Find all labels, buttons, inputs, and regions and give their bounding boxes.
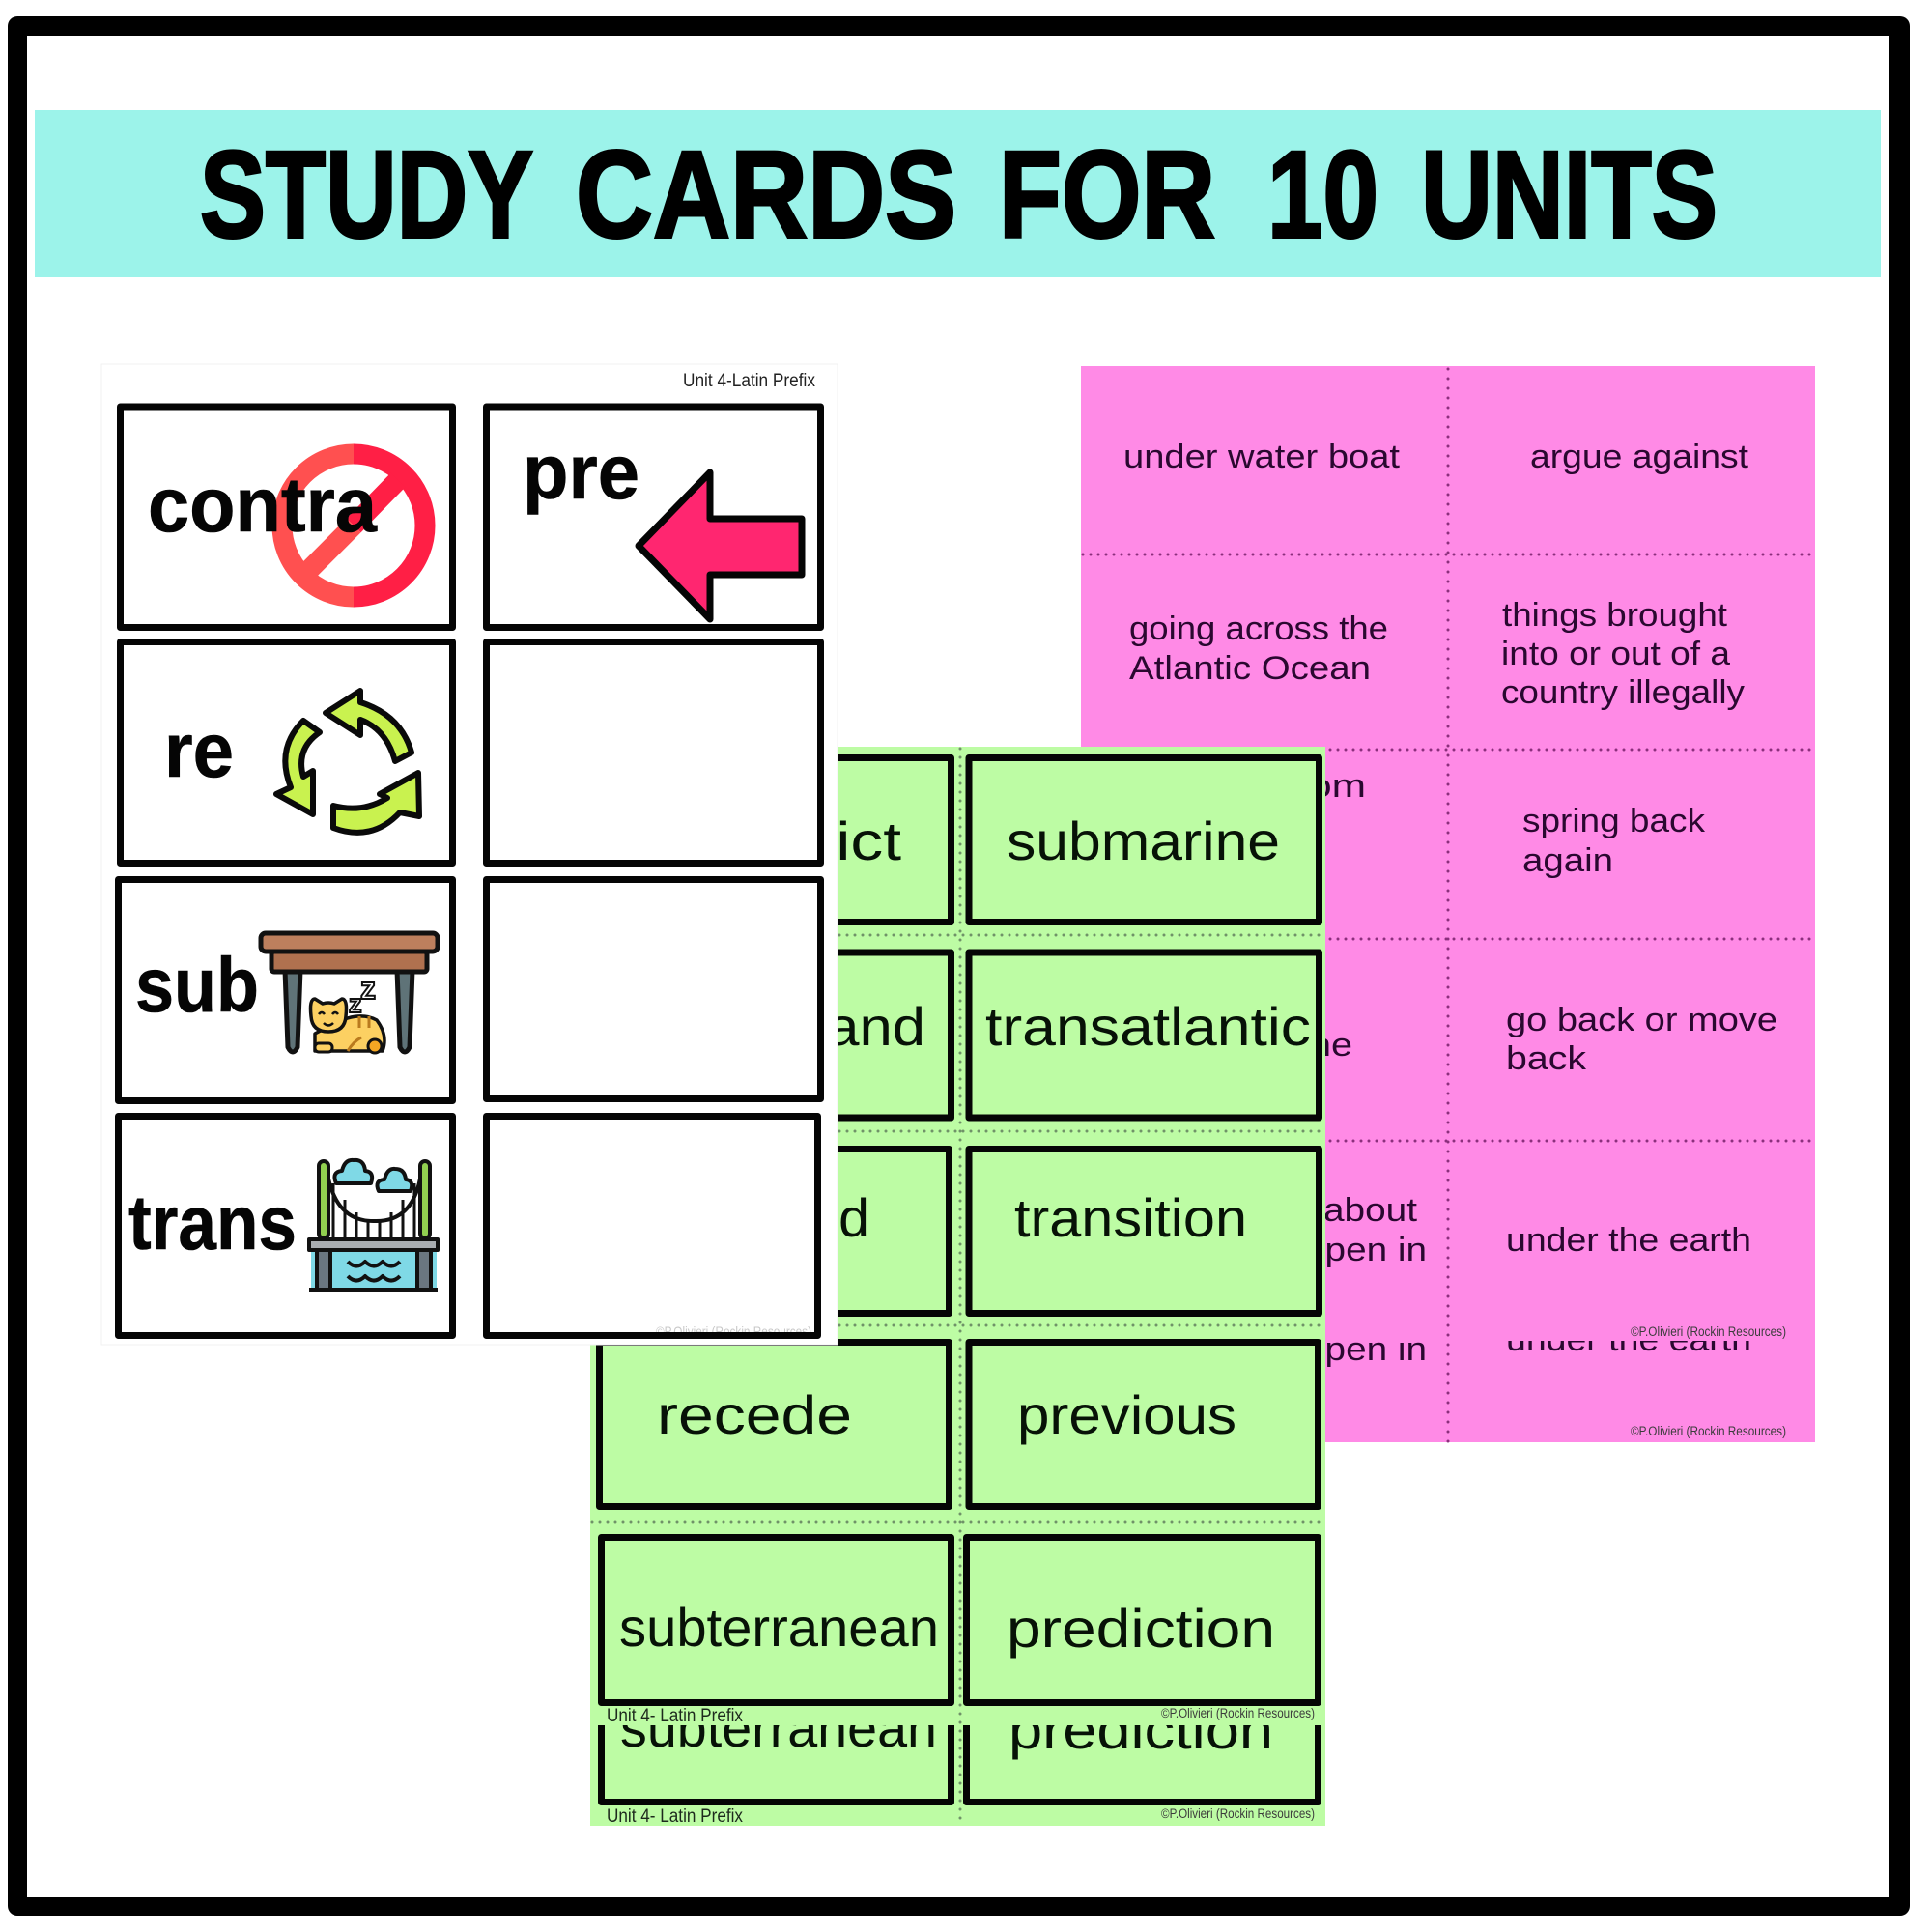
definition: spring back again: again [1522,842,1613,879]
card: blank 2 [487,879,821,1099]
card: contra: contra [148,462,377,548]
partly hidden definitions: the [1299,1027,1352,1064]
card: contraband [599,952,951,1118]
faint copyright: ©P.Olivieri (Rockin Resources) [656,1323,811,1339]
definition: spring back again [1522,803,1706,879]
partly hidden definitions [1263,768,1427,1268]
card: pre: pre [523,429,639,515]
definition: spring back again: spring back [1522,803,1706,839]
card: recede [599,1343,949,1507]
card: transatlantic [969,952,1320,1118]
clipped lower sheet definitions: ©P.Olivieri (Rockin Resources) [1631,1424,1786,1438]
card: transition [969,1150,1320,1314]
card: blank 3 [487,1117,817,1335]
icon: bridge [309,1160,438,1290]
card: re [120,641,452,864]
lower sheet peeking out: prediction [1009,1699,1273,1760]
card: re: re [164,707,234,793]
card: blank 1 [487,641,821,864]
card: rebound: rebound [667,1187,869,1248]
title: UNITS [1421,126,1718,265]
card: pre [487,407,821,628]
icon: left arrow [639,472,802,619]
card: contra [120,407,452,628]
card: contradict: contradict [618,810,902,871]
definition: argue against: argue against [1530,439,1749,475]
definition: go back or move back: back [1506,1040,1587,1077]
unit label: Unit 4-Latin Prefix [683,371,815,391]
card: recede: recede [657,1384,852,1445]
card: submarine: submarine [1007,810,1280,871]
copyright: ©P.Olivieri (Rockin Resources) [1631,1324,1786,1339]
definition: under water boat: under water boat [1123,439,1401,475]
card: prediction [966,1538,1318,1702]
panel: green word cards [590,747,1325,1827]
card: sub: z [349,989,361,1018]
panel: white prefix cards [101,364,838,1345]
definition: under the earth: under the earth [1506,1222,1751,1259]
clipped lower sheet definitions: under the earth [1506,1321,1751,1358]
footer label: Unit 4- Latin Prefix [607,1706,743,1726]
definition: go back or move back [1506,1002,1777,1077]
card: contradict [599,757,951,922]
card: sub [118,879,452,1101]
title: 10 [1267,126,1378,265]
card: submarine [969,757,1320,922]
copyright: ©P.Olivieri (Rockin Resources) [1161,1706,1315,1720]
card: sub: z [360,971,376,1006]
card: previous: previous [1017,1384,1236,1445]
lower sheet peeking out: subterranean [620,1697,937,1758]
card: rebound [599,1150,949,1314]
title: STUDY [200,126,533,265]
card: transition: transition [1014,1187,1247,1248]
definition: things brought illegally: things brought [1502,597,1728,634]
icon: prohibition sign [282,454,425,597]
definition: go back or move back: go back or move [1506,1002,1777,1038]
card: prediction: prediction [1007,1598,1275,1659]
title: CARDS [576,126,956,265]
card: sub: sub [135,942,259,1028]
lower sheet peeking out [601,1642,1318,1827]
definition: things brought illegally [1501,597,1745,711]
card: transatlantic: transatlantic [985,996,1311,1057]
definition: things brought illegally: country illegally [1501,674,1745,711]
icon: recycle arrows [276,691,419,833]
clipped lower sheet definitions [1263,1321,1786,1438]
card: trans: trans [128,1179,297,1265]
icon: cat under table [261,933,438,1053]
definition: going across the Atlantic Ocean: Atlantic Ocean [1129,650,1371,687]
partly hidden definitions: from [1284,768,1366,805]
card: previous [969,1343,1318,1507]
title banner [35,110,1881,277]
partly hidden definitions: happen in [1263,1232,1427,1268]
card: trans [118,1117,452,1335]
definition: going across the Atlantic Ocean: going across the [1129,611,1388,647]
title [200,126,1718,265]
title: FOR [999,126,1215,265]
lower sheet peeking out: ©P.Olivieri (Rockin Resources) [1161,1806,1315,1821]
card: subterranean: subterranean [619,1597,939,1658]
definition: going across the Atlantic Ocean [1129,611,1388,687]
partly hidden definitions: about [1323,1192,1418,1229]
clipped lower sheet definitions: happen in [1263,1331,1427,1368]
card: subterranean [601,1538,951,1702]
panel: pink definition cards [1081,366,1815,1442]
definition: things brought illegally: into or out of a [1501,636,1730,672]
card: contraband: contraband [628,996,925,1057]
lower sheet peeking out: Unit 4- Latin Prefix [607,1806,743,1827]
